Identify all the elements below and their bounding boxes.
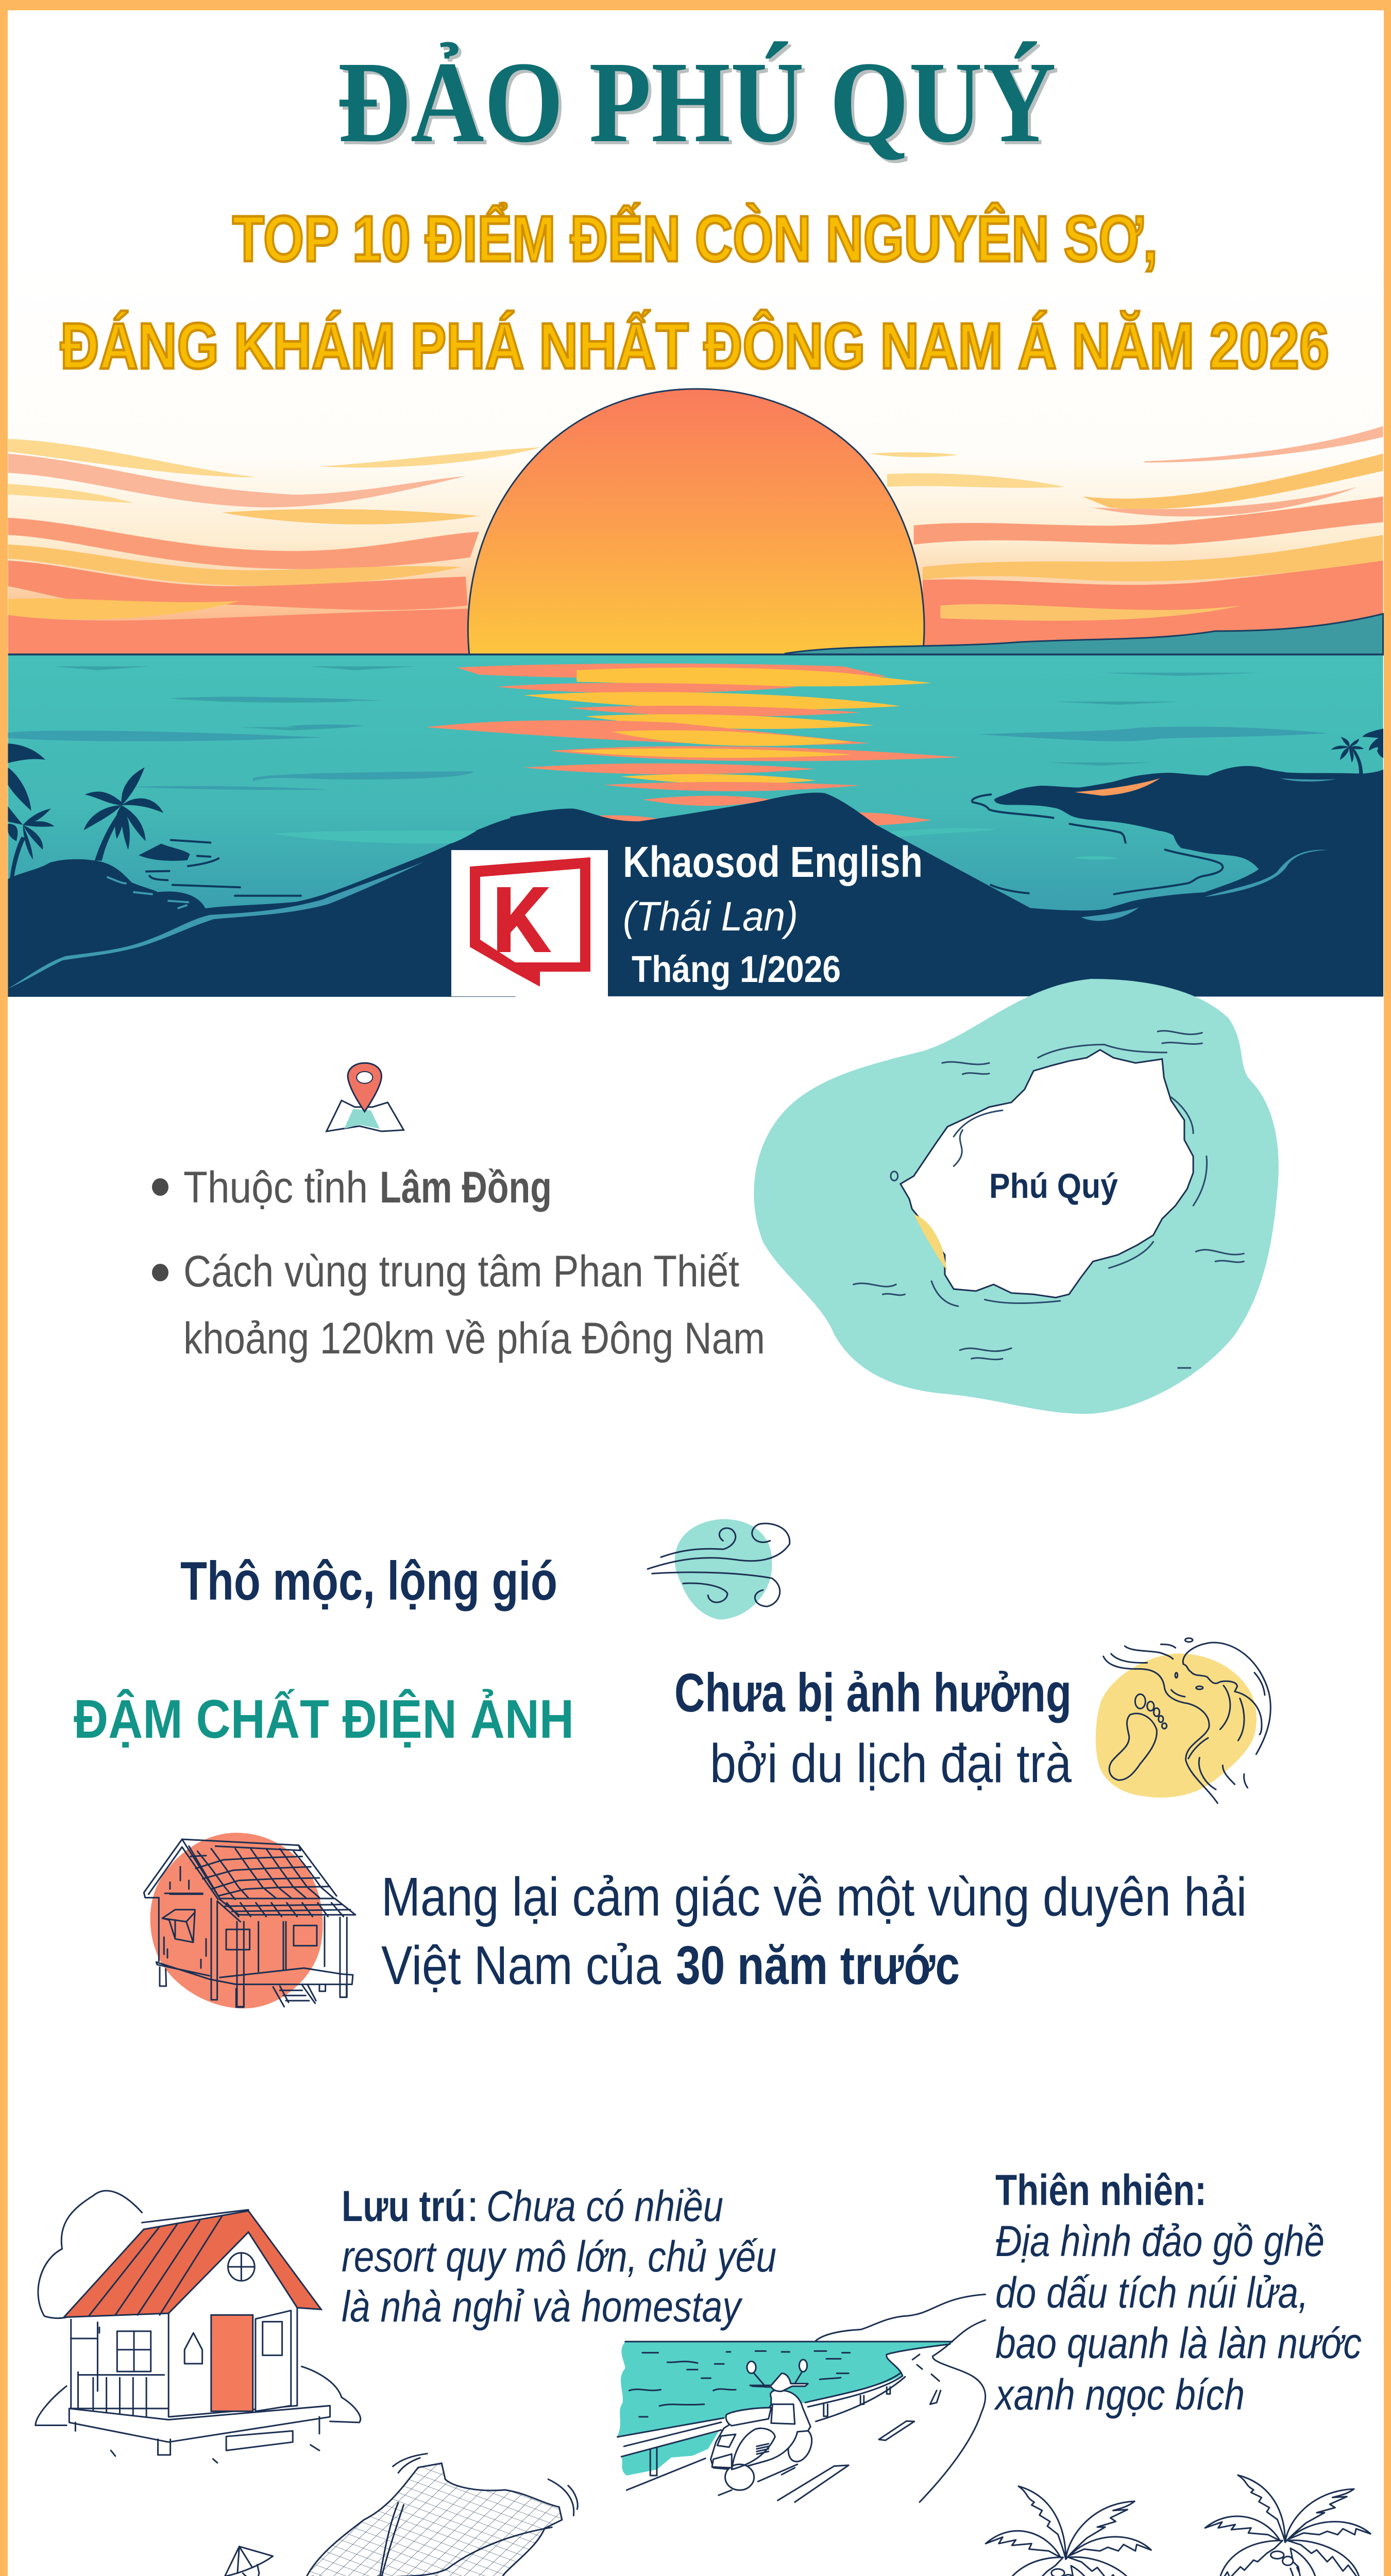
title: ĐẢO PHÚ QUÝ <box>337 38 1056 166</box>
text: nature <box>994 2166 1362 2419</box>
text: feeling of 30 years ago <box>381 1867 1247 1996</box>
subtitle <box>60 202 1329 382</box>
icon: stilt house <box>144 1833 355 2008</box>
icon: map pin <box>327 1063 404 1131</box>
waves <box>854 1031 1244 1368</box>
text: feeling of 30 years ago: 30 năm trước <box>676 1935 960 1996</box>
net <box>270 2453 578 2576</box>
bay details <box>889 726 1336 921</box>
illustration: beach house <box>36 2191 361 2463</box>
distant hills <box>785 614 1383 655</box>
illustration: fisherman casting net <box>37 2453 578 2576</box>
palm 1 <box>84 767 163 860</box>
sky <box>8 256 1383 655</box>
right coast, bay and palms <box>889 726 1383 996</box>
rock and rocks lines <box>107 840 301 908</box>
logo red frame and K <box>470 857 590 987</box>
text: feeling of 30 years ago: Mang lại cảm giác về một vùng duyên hải <box>381 1867 1247 1927</box>
title: ĐẢO PHÚ QUÝ <box>340 41 1059 170</box>
trunks <box>1032 2567 1323 2576</box>
publisher logo: Khaosod <box>451 850 608 996</box>
island map <box>754 979 1279 1414</box>
text: accommodation: Lưu trú <box>342 2182 466 2230</box>
text: nature: do dấu tích núi lửa, <box>995 2268 1309 2317</box>
sun <box>468 389 924 655</box>
text: accommodation: là nhà nghỉ và homestay <box>342 2282 743 2331</box>
sliver of sunset light <box>1075 778 1160 796</box>
hero illustration: sunset over sea <box>8 256 1383 996</box>
streaks <box>8 697 473 790</box>
shore stripe <box>8 862 424 989</box>
scooter <box>711 2360 815 2495</box>
heading: cinematic: ĐẬM CHẤT ĐIỆN ẢNH <box>74 1688 574 1750</box>
text: accommodation <box>342 2182 776 2331</box>
bullet 1 <box>152 1163 552 1212</box>
bullet 1: Lâm Đồng <box>380 1163 552 1212</box>
illustration: coastal road with scooter <box>617 2294 986 2502</box>
text: accommodation: resort quy mô lớn, chủ yếu <box>342 2232 776 2281</box>
icon: wind <box>648 1519 790 1620</box>
sea blob <box>754 979 1279 1414</box>
palm crowns <box>986 2475 1370 2576</box>
light water patch <box>273 831 477 843</box>
beach <box>914 1214 947 1272</box>
logo white box <box>451 850 608 996</box>
location bullets <box>152 1163 765 1363</box>
palm 2 <box>8 743 54 879</box>
central hill <box>510 793 1047 996</box>
left shore <box>8 817 515 997</box>
right land <box>994 766 1383 996</box>
subtitle: TOP 10 ĐIỂM ĐẾN CÒN NGUYÊN SƠ, <box>232 202 1158 275</box>
dark water streaks <box>53 666 1260 766</box>
road and rail lines <box>617 2294 986 2502</box>
icon: footprint on beach <box>1096 1638 1270 1803</box>
bullet 1: Thuộc tỉnh <box>183 1163 368 1212</box>
island land <box>901 1050 1193 1298</box>
text: nature: Địa hình đảo gồ ghề <box>995 2217 1325 2265</box>
sea <box>8 654 1383 996</box>
text: untouched by mass tourism: Chưa bị ảnh hưởng <box>674 1663 1072 1723</box>
clouds <box>8 426 1383 655</box>
bullet 2 <box>152 1247 765 1363</box>
source country: (Thái Lan) <box>623 893 798 939</box>
source date: Tháng 1/2026 <box>632 949 841 990</box>
bullet 2: Cách vùng trung tâm Phan Thiết <box>183 1247 739 1296</box>
bullet 2: khoảng 120km về phía Đông Nam <box>183 1314 765 1363</box>
horizon line <box>8 653 1383 655</box>
text: nature: xanh ngọc bích <box>994 2370 1245 2419</box>
sea <box>617 2342 953 2436</box>
illustration: palm trees and hammock <box>986 2475 1370 2576</box>
left coast and palms <box>8 697 515 997</box>
text: feeling of 30 years ago: Việt Nam của <box>381 1935 661 1996</box>
island label: Phú Quý <box>989 1166 1118 1206</box>
text: untouched by mass tourism <box>674 1663 1072 1794</box>
small palm <box>1331 728 1383 775</box>
text: untouched by mass tourism: bởi du lịch đại trà <box>710 1733 1072 1794</box>
text: accommodation: Chưa có nhiều <box>486 2182 723 2230</box>
source name: Khaosod English <box>623 838 923 886</box>
text: nature: Thiên nhiên: <box>995 2166 1207 2214</box>
heading: rustic, windswept: Thô mộc, lộng gió <box>180 1551 557 1612</box>
fisherman <box>210 2547 313 2576</box>
text: accommodation: : <box>467 2182 479 2230</box>
sun reflection <box>426 664 960 827</box>
